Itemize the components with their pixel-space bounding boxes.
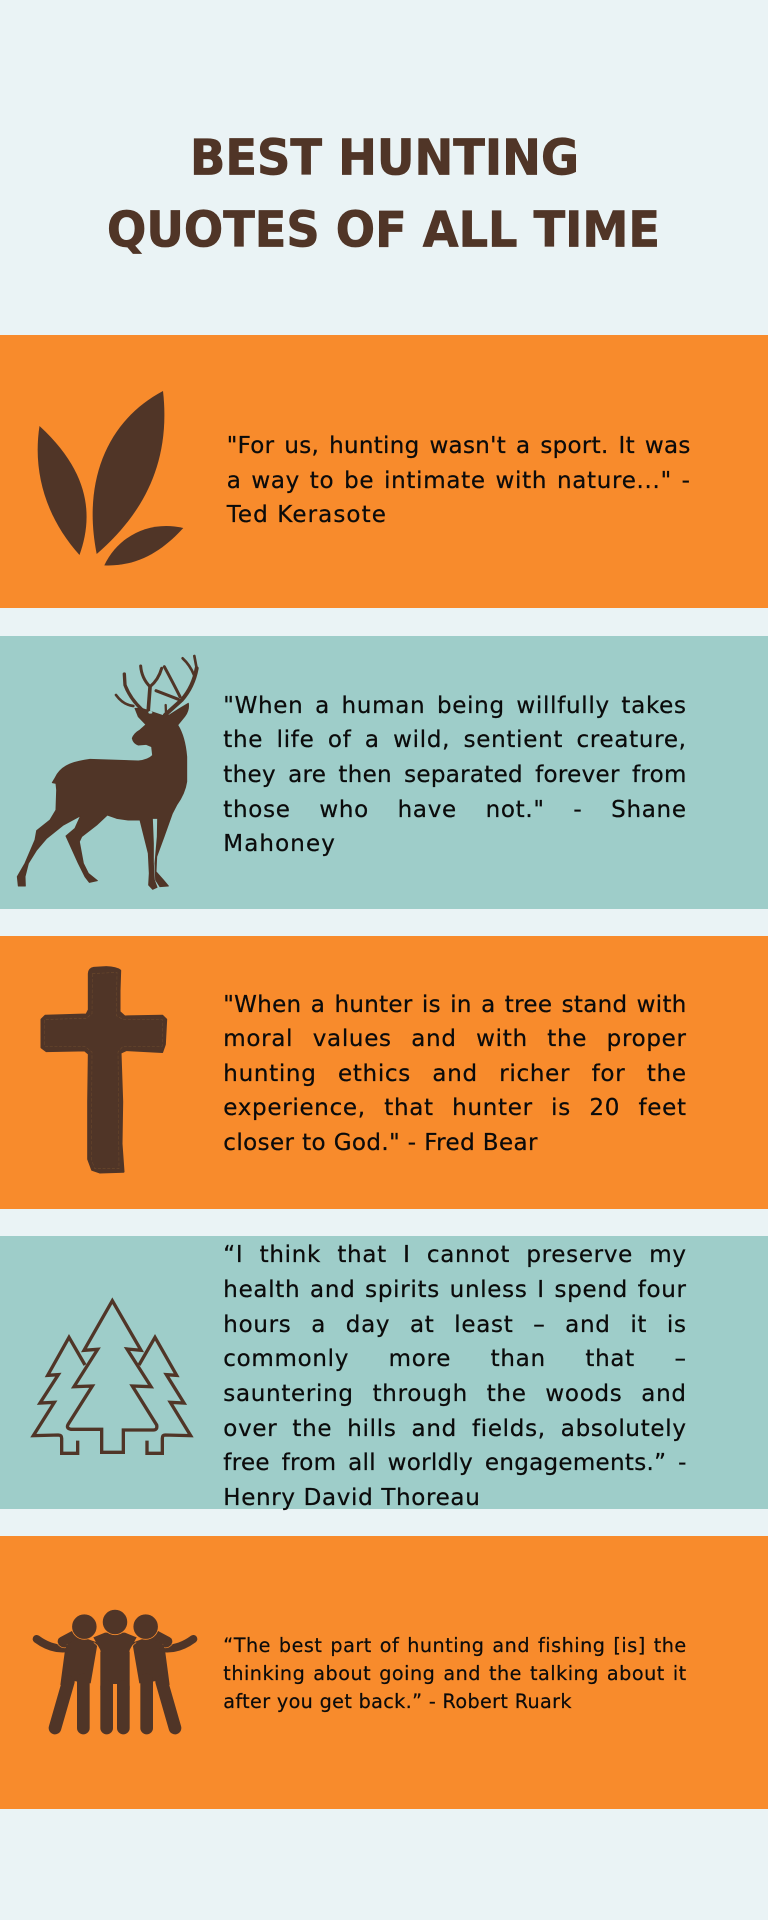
quote text: commonly more than that –: [223, 1346, 687, 1372]
quote text: sauntering through the woods and: [223, 1381, 687, 1407]
icon: leaves: [38, 391, 184, 566]
quote text: thinking about going and the talking about it: [223, 1662, 687, 1685]
quote text: moral values and with the proper: [223, 1026, 687, 1052]
quote text: closer to God." - Fred Bear: [223, 1130, 538, 1156]
quote text: a way to be intimate with nature..." -: [227, 468, 691, 494]
icon: pine trees: [30, 1298, 194, 1455]
quote text: hunting ethics and richer for the: [223, 1061, 687, 1087]
panel: Fred Bear quote: [0, 936, 768, 1209]
quote text: [223, 1242, 687, 1511]
quote text: experience, that hunter is 20 feet: [223, 1095, 687, 1121]
quote text: hours a day at least – and it is: [223, 1312, 687, 1338]
quote text: "For us, hunting wasn't a sport. It was: [227, 433, 691, 459]
quote text: [226, 433, 691, 528]
title: BEST HUNTING: [190, 129, 579, 186]
title: [107, 129, 660, 259]
quote text: Mahoney: [223, 831, 336, 857]
quote text: the life of a wild, sentient creature,: [223, 727, 687, 753]
left person: [37, 1614, 98, 1728]
right person: [132, 1614, 193, 1728]
panel: Ted Kerasote quote: [0, 335, 768, 608]
quote text: [223, 1634, 687, 1713]
quote text: Henry David Thoreau: [223, 1485, 480, 1511]
icon: deer: [16, 654, 199, 890]
quote text: Ted Kerasote: [227, 502, 387, 528]
quote text: [223, 693, 687, 857]
quote text: after you get back.” - Robert Ruark: [223, 1690, 572, 1713]
quote text: they are then separated forever from: [223, 762, 687, 788]
icon: three people embracing: [32, 1610, 198, 1734]
icon: wooden cross: [40, 966, 168, 1174]
panel: Robert Ruark quote: [0, 1536, 768, 1809]
quote text: “I think that I cannot preserve my: [223, 1242, 687, 1268]
quote text: "When a human being willfully takes: [223, 693, 687, 719]
panel: Henry David Thoreau quote: [0, 1236, 768, 1509]
quote text: “The best part of hunting and fishing [is] the: [223, 1634, 687, 1657]
centre person: [93, 1609, 137, 1736]
quote text: health and spirits unless I spend four: [223, 1277, 687, 1303]
panel: Shane Mahoney quote: [0, 636, 768, 909]
quote text: "When a hunter is in a tree stand with: [223, 992, 687, 1018]
quote text: over the hills and fields, absolutely: [223, 1416, 687, 1442]
quote text: those who have not." - Shane: [223, 797, 687, 823]
quote text: free from all worldly engagements.” -: [223, 1450, 687, 1476]
quote text: [223, 992, 687, 1156]
